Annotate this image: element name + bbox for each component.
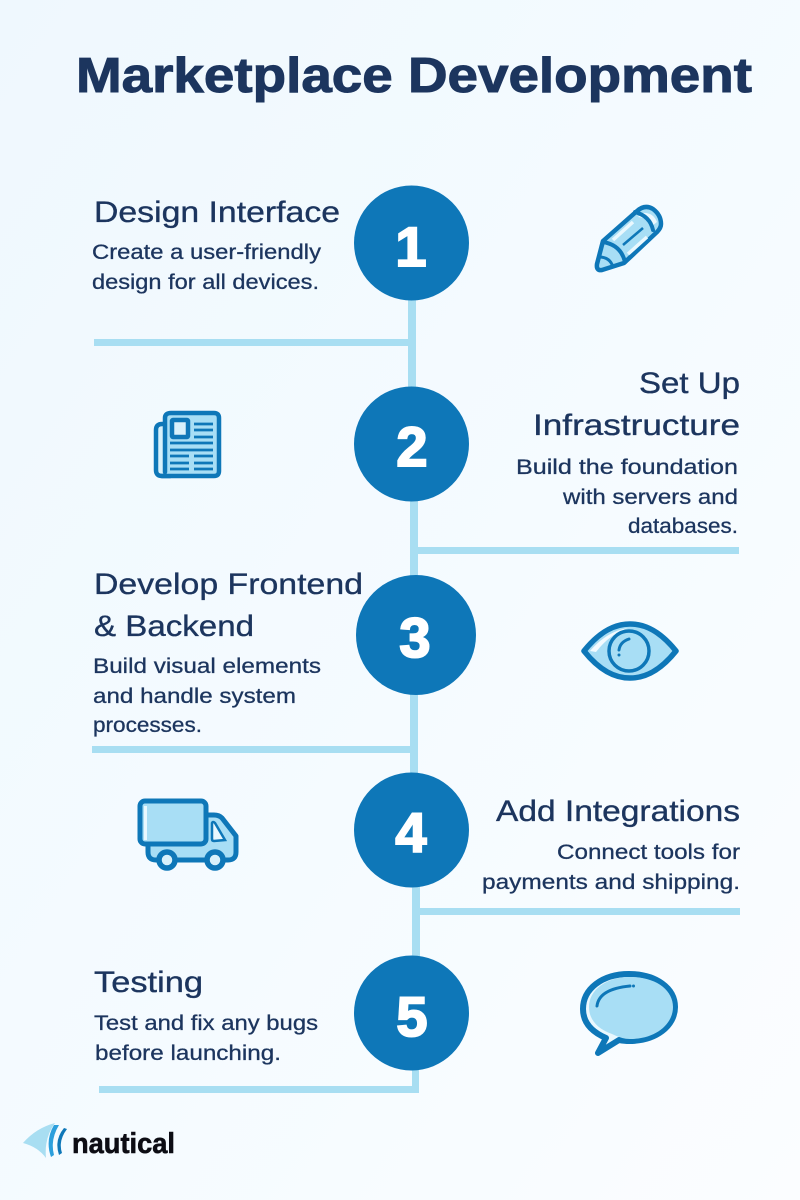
step 3 bbox=[93, 568, 676, 737]
step 4 number badge bbox=[354, 772, 469, 888]
step 2 description: databases. bbox=[628, 514, 738, 538]
step 1 number badge: 1 bbox=[395, 215, 427, 278]
logo sail mark bbox=[23, 1123, 67, 1158]
step 1 description: design for all devices. bbox=[92, 270, 319, 294]
step 2 number badge: 2 bbox=[396, 415, 428, 478]
step 3 description: and handle system bbox=[93, 684, 296, 708]
step 5 heading: Testing bbox=[94, 966, 203, 999]
step 4 description: payments and shipping. bbox=[482, 870, 740, 894]
step 4 description: Connect tools for bbox=[557, 840, 740, 864]
step 4 description bbox=[482, 840, 740, 894]
icon: pencil bbox=[597, 207, 661, 270]
step 3 number badge: 3 bbox=[399, 606, 431, 669]
step 1 description bbox=[92, 240, 321, 294]
icon: newspaper bbox=[156, 413, 219, 476]
icon: delivery truck bbox=[140, 801, 236, 868]
step 5 bbox=[94, 956, 675, 1070]
logo: nautical bbox=[23, 1123, 175, 1160]
step 4 number badge: 4 bbox=[395, 801, 427, 864]
step 1 description: Create a user-friendly bbox=[92, 240, 321, 264]
step 5 number badge bbox=[354, 956, 469, 1070]
step 1 bbox=[92, 186, 661, 300]
step 5 description bbox=[94, 1011, 318, 1065]
step 2 heading: Infrastructure bbox=[533, 409, 740, 442]
step 2 heading: Set Up bbox=[639, 367, 740, 400]
step 2 description: Build the foundation bbox=[516, 455, 738, 479]
logo wordmark: nautical bbox=[72, 1128, 175, 1160]
step 3 description bbox=[93, 654, 321, 737]
step 5 description: before launching. bbox=[95, 1041, 281, 1065]
step 5 number badge: 5 bbox=[396, 985, 428, 1048]
icon: eye bbox=[584, 624, 676, 678]
step 5 description: Test and fix any bugs bbox=[94, 1011, 318, 1035]
step 2 description bbox=[516, 455, 738, 538]
step 3 number badge bbox=[356, 575, 476, 695]
step 2 heading bbox=[533, 367, 740, 442]
title: Marketplace Development bbox=[76, 49, 752, 103]
step 3 heading: & Backend bbox=[94, 610, 254, 643]
step 4 bbox=[140, 772, 740, 894]
step 3 description: Build visual elements bbox=[93, 654, 321, 678]
step 2 description: with servers and bbox=[562, 485, 738, 509]
icon: speech bubble bbox=[583, 974, 675, 1053]
step 4 heading: Add Integrations bbox=[496, 795, 740, 828]
step 3 heading: Develop Frontend bbox=[94, 568, 363, 601]
step 1 number badge bbox=[354, 186, 469, 300]
step 2 number badge bbox=[354, 386, 469, 502]
step 3 heading bbox=[94, 568, 363, 643]
step 1 heading: Design Interface bbox=[94, 196, 340, 229]
step 3 description: processes. bbox=[93, 713, 202, 737]
timeline connectors bbox=[92, 290, 740, 1093]
step 2 bbox=[156, 367, 740, 538]
